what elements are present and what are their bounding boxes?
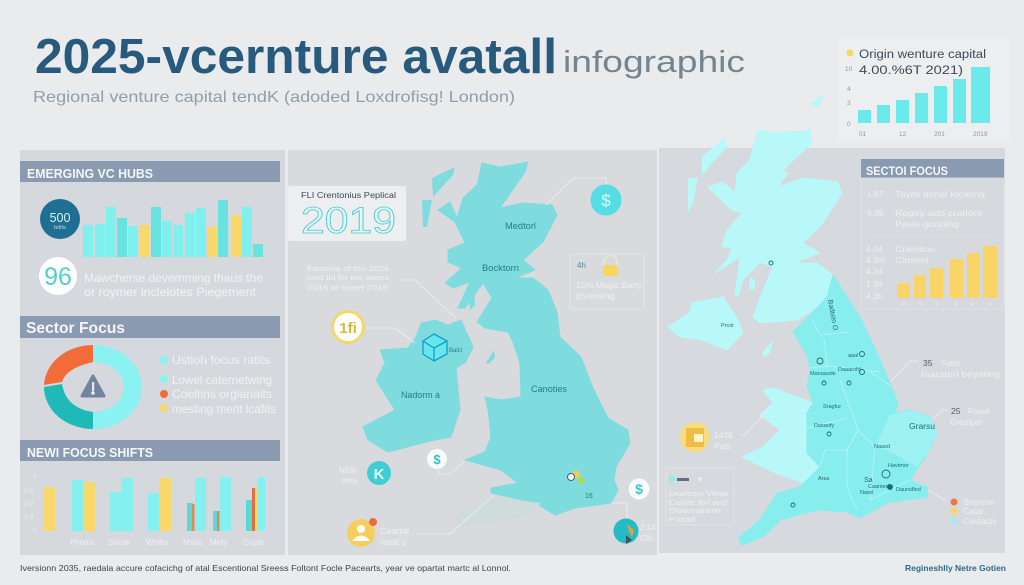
stat badge: 500 (40, 199, 80, 239)
panel: 2019 callout: FLI Crentonius Peplical (301, 190, 396, 200)
panel: sector focus right: 1.97 (867, 189, 884, 199)
bar chart: focus shifts: Phoals (70, 538, 94, 547)
icon: yellow stack badge (680, 407, 770, 452)
icon: yellow ring badge: 1fi (339, 320, 357, 337)
bar chart: focus shifts (24, 474, 265, 547)
icon: London marker (568, 470, 584, 484)
legend: sector focus (160, 353, 276, 416)
donut chart: sector focus (44, 345, 142, 429)
bar chart: focus shifts: 0 (33, 527, 37, 534)
icon: cube (423, 334, 447, 361)
map: Ireland (363, 320, 473, 452)
bar chart: focus shifts: Secoir (108, 538, 131, 547)
icon: capital profile badge: Caartal (380, 526, 409, 536)
panel: sector focus right: Regiry add crationt (895, 208, 983, 218)
panel: sector focus right: 1 (935, 302, 938, 308)
map: right UK regional (668, 93, 937, 545)
panel: top-right origin chart: 3 (847, 100, 851, 107)
panel: magic party callout: 15% Magic Barty (576, 280, 643, 290)
legend: regional map: Cantacts (963, 516, 997, 526)
callout: 2024 note: Easoma of thu 2024 (307, 264, 389, 273)
panel: top-right origin chart (838, 38, 1010, 142)
panel: top-right origin chart: 4.00.%6T 2021) (859, 65, 963, 77)
stat badge: 500: 500 (50, 211, 70, 225)
icon: dollar badge north (546, 178, 622, 216)
heading: emerging VC hubs: EMERGING VC HUBS (27, 166, 153, 181)
legend: regional map (928, 490, 997, 526)
bar chart: emerging hubs (83, 200, 263, 257)
bar chart: focus shifts: Mefy (210, 538, 227, 547)
legend: regional map: Shannal (963, 497, 994, 507)
bar chart: focus shifts: 3·9 (24, 514, 34, 521)
map: right UK regional: Manaasde (810, 371, 836, 377)
map: center British Isles: Canoties (531, 384, 567, 395)
panel: top-right origin chart: 01 (859, 131, 867, 138)
legend: regional map: Calar (963, 506, 983, 516)
panel: top-right origin chart: 10 (845, 66, 853, 73)
icon: padlock (603, 256, 618, 276)
panel: center map background (288, 150, 657, 555)
icon: capital profile badge (347, 495, 494, 547)
panel: sector focus right: 3 (954, 302, 957, 308)
legend: sector focus: Ustioh focus ratits (172, 353, 270, 367)
bar chart: focus shifts: 5·0 (24, 488, 34, 495)
panel: top-right origin chart: 201 (934, 131, 945, 138)
text block: hubs note: or roymer inclelotes Piegement (84, 285, 257, 299)
title: 2025-vcernture avatall (35, 30, 557, 84)
panel: legend note: Pafatl (669, 515, 695, 524)
callout: 2024 note: neid tbl for the uanes (307, 273, 389, 282)
icon: yellow stack badge: 14'f& (714, 430, 733, 440)
map: right UK regional: aaol (848, 353, 858, 359)
stat badge: 96 (39, 257, 77, 295)
panel: sector focus right: SECTOI FOCUS (866, 166, 948, 178)
panel: top-right origin chart: 2019 (973, 131, 988, 138)
panel: top-right origin chart: 0 (847, 121, 851, 128)
map: center British Isles: 16 (585, 493, 593, 500)
callout: factor: Iaaratorl beyating (921, 369, 1000, 379)
map: Scotland (708, 130, 842, 323)
map: center British Isles: Medtorl (505, 221, 536, 232)
map: Wales (742, 388, 822, 483)
text block: hubs note (84, 271, 263, 299)
panel: legend note: Calrlac forl and (669, 498, 727, 507)
map: center British Isles: Nadorm a (401, 390, 441, 401)
map: right UK regional: Badtstn O (826, 299, 838, 332)
icon: yellow ring badge (332, 312, 415, 343)
title: infographic (563, 44, 745, 79)
legend: sector focus: Lowel caternetwing (172, 373, 272, 387)
panel: sector focus right: 4 (988, 302, 991, 308)
heading: new focus shifts (20, 440, 280, 461)
bar chart: yellow growth (897, 246, 997, 298)
icon: capital profile badge: nstal c (380, 537, 407, 547)
panel: sector focus right: 5 (919, 302, 922, 308)
text block: hubs note: Mawcherse devemming thaus the (84, 271, 263, 285)
map: right UK regional: Arsa (818, 476, 830, 482)
map: England regions (738, 275, 937, 545)
heading: sector focus (20, 316, 280, 338)
panel: sector focus right: 4.3% (866, 255, 886, 265)
icon: teal K badge (339, 461, 391, 485)
map: right UK regional: Daaarofd (838, 367, 861, 373)
map: right UK regional: Daunsfled (896, 487, 921, 493)
bar chart: focus shifts: 0 (33, 474, 37, 481)
panel: sector focus right: 4.95 (867, 208, 884, 218)
panel: 2019 callout: 2019 (301, 200, 396, 241)
bar chart: focus shifts: Msaic (183, 538, 204, 547)
map: right UK regional: Havtmor (888, 463, 909, 469)
footer note: Iversionn 2035, raedala accure cofacichg of atal Escentional Sreess Foltont Focle Pacearts, year ve opartat martc al Lonnol. (20, 563, 511, 573)
map: center British Isles: Balcl (449, 348, 462, 354)
panel: sector focus right: 4 (971, 302, 974, 308)
panel: sector focus right: 1.39 (866, 279, 883, 289)
panel: legend note: Dlaavmaraion (669, 506, 721, 515)
icon: globe badge: 2:14 (640, 523, 656, 532)
map: right UK regional: Nasd (860, 490, 873, 496)
heading: new focus shifts: NEWI FOCUS SHIFTS (27, 445, 153, 460)
panel: sector focus right: Pavis gunding (895, 219, 959, 229)
icon: globe badge: C% (640, 534, 653, 543)
icon: globe badge (614, 518, 656, 544)
panel: sector focus right: Tayits tional locating (895, 189, 985, 199)
map: right UK regional: Sa (864, 477, 873, 484)
icon: warning triangle (82, 376, 104, 396)
icon: teal K badge: N£% (339, 466, 356, 475)
map: East Anglia (875, 410, 937, 467)
panel: magic party callout: Eventing (576, 291, 615, 301)
icon: dollar badge east (611, 478, 650, 520)
heading: emerging VC hubs (20, 161, 280, 182)
map: right UK regional: Naasd (874, 444, 890, 450)
panel: sector focus right: 4.34 (866, 266, 883, 276)
callout: factor: 35 (923, 358, 933, 368)
callout: factor (890, 358, 1000, 382)
panel: sector focus right: 4 (902, 302, 905, 308)
callout: regional (932, 406, 989, 427)
map: right UK regional: Caanted (868, 484, 889, 490)
map: Northern Ireland (668, 297, 743, 350)
icon: dollar badge west (427, 449, 465, 474)
bar chart: focus shifts: Wnilts (146, 538, 168, 547)
map: right UK regional: Dasaofy (814, 423, 834, 429)
icon: teal K badge: K (374, 466, 385, 483)
panel: sector focus right: Cnention (895, 244, 935, 254)
stat badge: 500: bdifa (54, 225, 67, 231)
panel: magic party callout (570, 254, 644, 309)
panel: top-right origin chart: 4 (847, 86, 851, 93)
panel: 2019 callout (288, 186, 406, 241)
icon: yellow stack badge: Pats (714, 441, 731, 451)
legend: sector focus: mesting ment lcafits (172, 402, 276, 416)
legend: sector focus: Coeltins orglanaits (172, 387, 272, 401)
heading: sector focus: Sector Focus (26, 320, 125, 337)
stat badge: 96: 96 (44, 263, 72, 291)
icon: teal K badge: bnts (342, 476, 357, 485)
map: center British Isles (363, 162, 630, 525)
panel: left column (20, 150, 285, 555)
outer islands (702, 137, 727, 175)
bar chart: focus shifts: Gapls (243, 538, 264, 547)
bar chart: focus shifts: 2·9 (24, 501, 34, 508)
panel: magic party callout: 4h (577, 261, 586, 270)
panel: sector focus right: Cantent (895, 255, 930, 265)
panel: top-right origin chart: Origin wenture capital (859, 49, 986, 61)
callout: factor: Fotor (941, 358, 961, 368)
map: Great Britain (438, 162, 630, 515)
panel: legend note (666, 468, 734, 525)
map: right UK regional: Grarsu (909, 421, 935, 431)
panel: sector focus right (861, 159, 1004, 309)
map: center British Isles: Bocktorn (482, 263, 519, 274)
panel: sector focus right: 4.3h (866, 291, 883, 301)
callout: regional: Crealper (950, 417, 983, 427)
icon: dollar badge north: $ (601, 191, 611, 210)
callout: 2024 note: 2019 or lowet 2019 (307, 283, 388, 292)
map: right UK regional: Prcol (721, 323, 734, 329)
icon: dollar badge west: $ (433, 452, 441, 467)
footer source: Regineshlly Netre Gotien (905, 563, 1006, 573)
panel: sector focus right: 4.04 (866, 244, 883, 254)
callout: 2024 note (307, 264, 456, 318)
icon: dollar badge east: $ (635, 481, 643, 497)
callout: regional: Foaal (968, 406, 989, 416)
panel: legend note: Deartrom Vlewe (669, 489, 729, 498)
panel: top-right origin chart: 12 (899, 131, 907, 138)
callout: regional: 25 (951, 406, 961, 416)
icon: city markers (769, 261, 892, 507)
map: right UK regional: Sragfur (823, 404, 841, 410)
panel: right map background (659, 148, 1005, 553)
subtitle: Regional venture capital tendK (adoded Loxdrofisg! London) (33, 89, 515, 106)
